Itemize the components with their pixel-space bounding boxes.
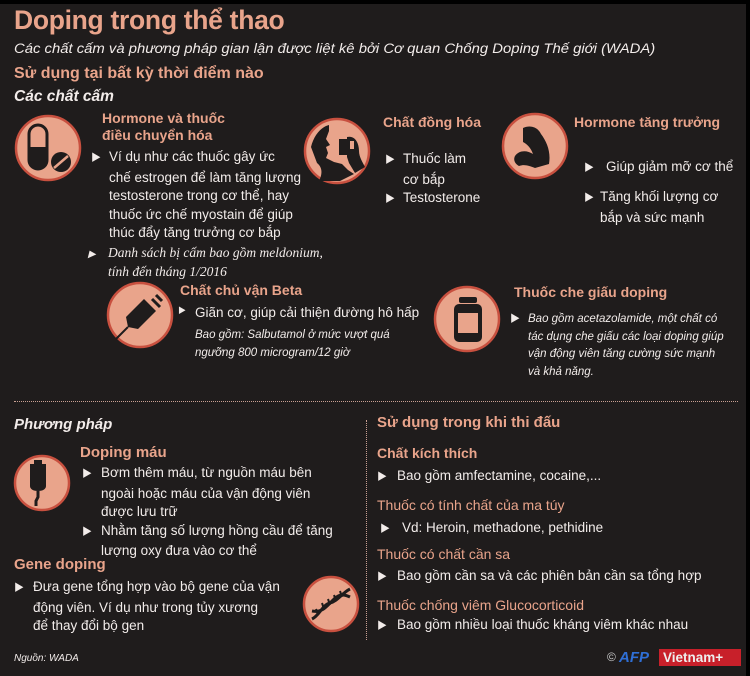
logo: AFP Vietnam+: AFP — [619, 649, 649, 666]
bullets: gene doping — [14, 579, 280, 633]
bullet: masking: vận động viên tăng cường sức mạnh — [528, 348, 715, 360]
bullets: blood doping: ▶ — [82, 526, 92, 538]
bullet: narcotics: ▶ — [380, 524, 390, 535]
bullets: hormone — [91, 149, 301, 240]
bullets: growth hormone: Giúp giảm mỡ cơ thể — [606, 159, 733, 174]
note: salbutamol: ngưỡng 800 microgram/12 giờ — [195, 347, 350, 359]
bullet: glucocorticoids: ▶ — [377, 621, 387, 632]
heading: hormone: Hormone và thuốc — [102, 110, 225, 126]
bullets: anabolic: Testosterone — [403, 190, 480, 205]
bullet: stimulants: ▶ — [377, 472, 387, 483]
bullets: gene doping: ▶ — [14, 583, 24, 594]
panel: growth hormone: bắp và sức mạnh — [600, 210, 704, 224]
panel: growth hormone: Tăng khối lượng cơ — [600, 189, 718, 204]
bullets: anabolic: cơ bắp — [403, 172, 445, 186]
heading: blood doping: Doping máu — [80, 444, 167, 461]
panel: anabolic — [383, 114, 482, 205]
note: salbutamol — [195, 328, 390, 359]
bullets: anabolic: ▶ — [385, 155, 395, 166]
bullet: beta: Giãn cơ, giúp cải thiện đường hô hấp — [195, 305, 419, 320]
bullets: anabolic: ▶ — [385, 194, 395, 205]
bullets: anabolic — [385, 151, 480, 205]
heading: hormone — [102, 110, 225, 143]
heading: gene doping: Gene doping — [14, 556, 106, 573]
heading: anabolic: Chất đồng hóa — [383, 114, 481, 130]
bullets: blood doping: lượng oxy đưa vào cơ thể — [101, 543, 257, 558]
bullets: gene doping: Đưa gene tổng hợp vào bộ gene của vận — [33, 579, 280, 594]
note: meldonium: ▶ — [88, 249, 96, 260]
bullets: blood doping: Nhằm tăng số lượng hồng cầu để tăng — [101, 522, 333, 538]
logo: AFP Vietnam+: © — [607, 650, 616, 664]
panel: beta agonists — [178, 282, 419, 359]
icon: DNA — [302, 576, 360, 632]
panel: growth hormone — [574, 114, 733, 225]
bullets: growth hormone: ▶ — [584, 163, 594, 174]
source: Nguồn: WADA — [14, 653, 79, 664]
section heading: any time: Sử dụng tại bất kỳ thời điểm nào — [14, 65, 264, 82]
heading: narcotics: Thuốc có tính chất của ma túy — [377, 497, 565, 513]
panel: in-competition — [377, 414, 702, 632]
subheading: banned substances: Các chất cấm — [14, 88, 114, 105]
heading: beta: Chất chủ vận Beta — [180, 282, 302, 298]
panel: gene doping — [14, 556, 280, 633]
bullets: hormone: Ví dụ như các thuốc gây ức — [109, 149, 275, 164]
bullet: masking — [510, 312, 724, 378]
bullets: blood doping: Bơm thêm máu, từ nguồn máu bên — [101, 465, 312, 480]
note: salbutamol: Bao gồm: Salbutamol ở mức vượt quá — [195, 329, 390, 341]
bullet: cannabinoids: Bao gồm cần sa và các phiên bản cần sa tổng hợp — [397, 568, 702, 583]
heading: in competition: Sử dụng trong khi thi đấu — [377, 414, 560, 431]
bullets: gene doping: để thay đổi bộ gen — [33, 618, 144, 633]
icon: pills — [14, 114, 82, 182]
heading: growth hormone: Hormone tăng trưởng — [574, 114, 720, 130]
bullet: cannabinoids: ▶ — [377, 572, 387, 583]
note: meldonium: Danh sách bị cấm bao gồm meldonium, — [108, 245, 323, 260]
bullets: hormone: ▶ — [91, 153, 101, 164]
heading: cannabinoids: Thuốc có chất cần sa — [377, 546, 510, 562]
bullet: narcotics: Vd: Heroin, methadone, pethidine — [402, 520, 603, 535]
bullets: hormone: chế estrogen để làm tăng lượng — [109, 170, 301, 184]
heading: methods: Phương pháp — [14, 416, 112, 433]
bullets: hormone: thúc đẩy tăng trưởng cơ bắp — [109, 225, 281, 240]
bullet: glucocorticoids: Bao gồm nhiều loại thuốc kháng viêm khác nhau — [397, 617, 688, 632]
bullets: blood doping: ngoài hoặc máu của vận động viên — [101, 486, 310, 500]
subtitle: Các chất cấm và phương pháp gian lận được liệt kê bởi Cơ quan Chống Doping Thế giới (WADA) — [14, 41, 655, 56]
note: meldonium: tính đến tháng 1/2016 — [108, 264, 227, 279]
bullet: beta: ▶ — [178, 306, 186, 315]
bullets: anabolic: Thuốc làm — [403, 151, 466, 166]
icon: muscle arm — [502, 112, 568, 180]
icon: jar — [434, 286, 500, 352]
panel: blood doping — [80, 444, 333, 558]
note: meldonium — [88, 245, 323, 279]
bullet: masking: và khả năng. — [528, 366, 594, 378]
bullet: masking: ▶ — [510, 314, 520, 325]
bullet: masking: Bao gồm acetazolamide, một chất có — [528, 313, 717, 325]
bullet: stimulants: Bao gồm amfectamine, cocaine,... — [397, 468, 601, 483]
bullets: gene doping: động viên. Ví dụ như trong tủy xương — [33, 600, 258, 614]
panel: hormone modulators — [88, 110, 323, 279]
title: Doping trong thể thao — [14, 5, 284, 35]
icon: inhaler — [304, 118, 370, 184]
panel: masking agents — [510, 284, 724, 378]
icon: blood bag — [14, 454, 70, 512]
heading: stimulants: Chất kích thích — [377, 445, 477, 461]
bullets: hormone: testosterone trong cơ thể, hay — [109, 188, 289, 203]
panel: growth hormone: ▶ — [584, 193, 594, 204]
heading: glucocorticoids: Thuốc chống viêm Glucocorticoid — [377, 597, 584, 613]
bullets: blood doping: ▶ — [82, 469, 92, 480]
bullets: blood doping: được lưu trữ — [101, 504, 177, 519]
logo: AFP Vietnam+ — [607, 649, 741, 666]
icon: syringe — [106, 282, 174, 348]
logo: AFP Vietnam+: Vietnam+ — [663, 650, 723, 665]
bullets: hormone: thuốc ức chế myostain để giúp — [109, 206, 293, 222]
heading: masking: Thuốc che giấu doping — [514, 284, 667, 300]
heading: hormone: điều chuyển hóa — [102, 127, 212, 143]
bullet: masking: tác dụng che giấu các loại doping giúp — [528, 330, 724, 342]
bullets: blood doping — [82, 465, 333, 558]
